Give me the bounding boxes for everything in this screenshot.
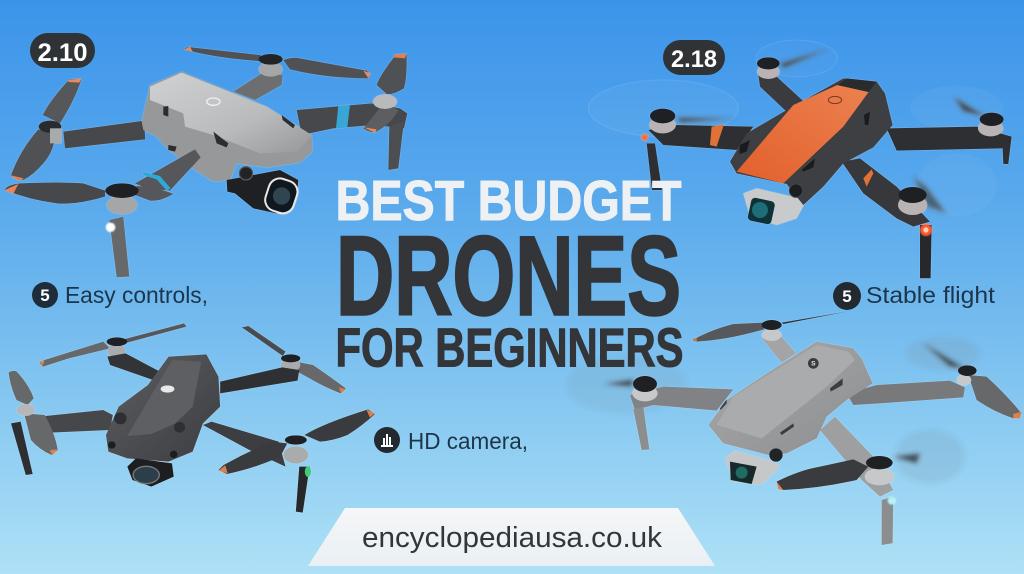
arms [107,353,160,380]
feature: HD camera: HD camera, [408,428,528,454]
rear props [184,47,370,78]
right arm and leg [297,103,407,135]
spinning rotors [588,80,738,137]
front right arm [203,422,286,467]
rear arm [233,73,283,100]
feature: easy controls: 5 [40,286,50,305]
title line 3: FOR BEGINNERS [336,316,684,378]
title line 2: DRONES [336,214,681,338]
drone: orange top right [588,40,1012,278]
drone: silver top left [5,47,407,277]
arms [762,337,796,363]
badge: 2.18 [663,40,725,75]
spinning rotors [567,357,687,413]
blades [693,323,764,342]
front arm and leg [135,149,201,191]
title line 1: BEST BUDGET [336,169,682,233]
feature: easy controls: Easy controls, [65,282,208,308]
motors [632,385,658,401]
body [106,354,220,462]
feature: stable flight: Stable flight [866,282,996,308]
body [142,72,313,182]
feature: stable flight [833,282,996,310]
front prop [777,459,868,490]
camera gimbal [227,170,298,213]
badge: 2.10: 2.10 [38,39,88,67]
feature: stable flight: 5 [842,287,852,306]
camera [127,458,174,487]
camera [725,451,780,485]
arms [758,75,804,113]
drone: grey bottom right [567,312,1022,545]
drone: grey bottom right: S [811,361,816,368]
front prop [5,182,105,204]
left prop [9,371,34,405]
url banner: encyclopediausa.co.uk [362,522,663,554]
props back [40,342,110,367]
motors [649,117,676,133]
title [336,169,684,378]
badge: 2.10 [30,33,95,68]
left arm [63,121,145,148]
body [730,78,893,205]
drone: dark grey bottom left [9,323,375,513]
badge: 2.18: 2.18 [671,46,717,73]
gimbal camera [743,188,807,225]
red LEDs [920,224,932,236]
url banner [308,508,715,566]
body [708,342,873,455]
